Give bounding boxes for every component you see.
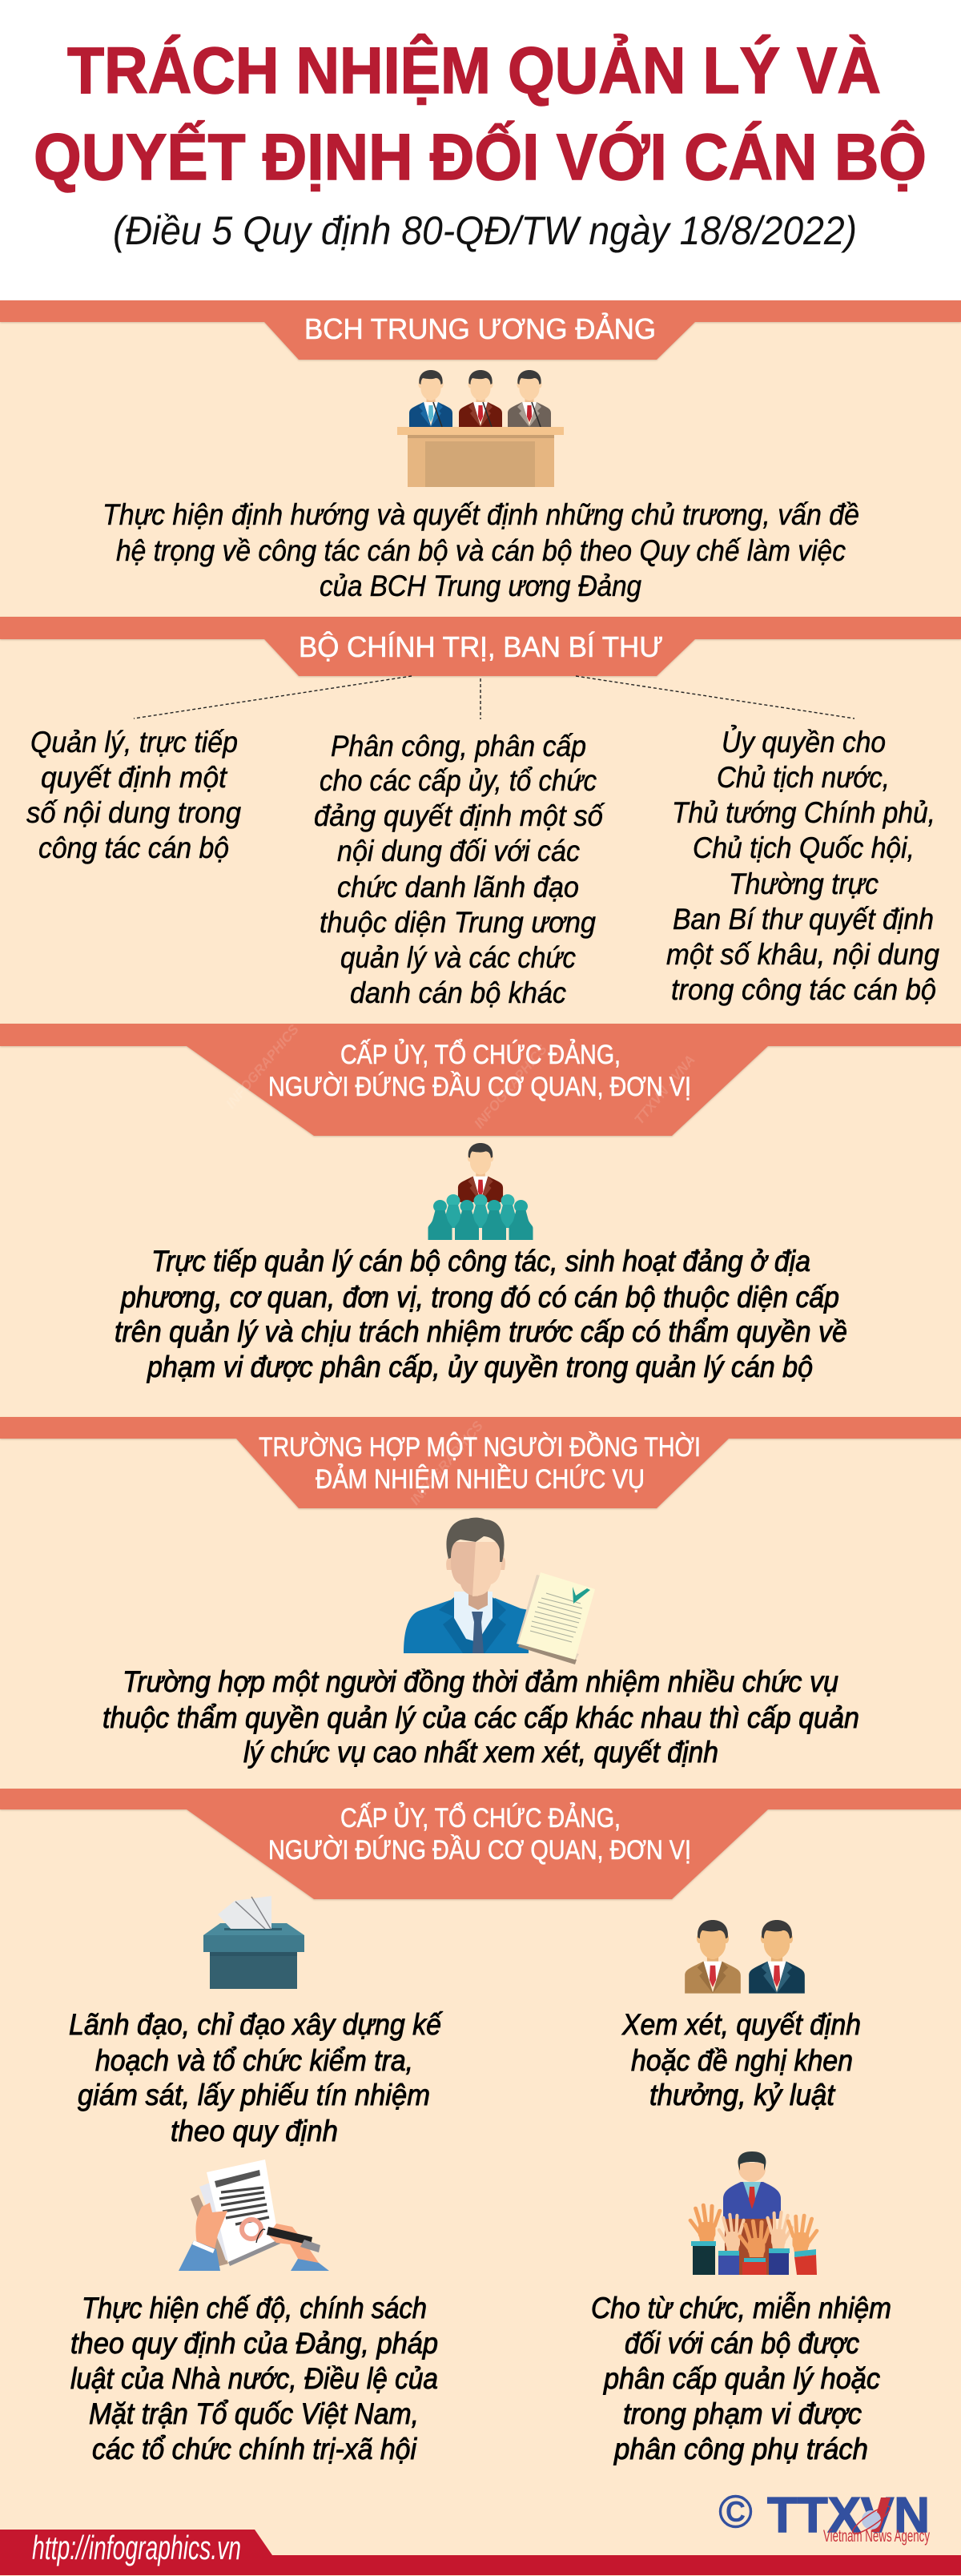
icon: leader and crowd (428, 1143, 533, 1240)
icon: three leaders at podium (397, 370, 564, 487)
text: policy duty: các tổ chức chính trị-xã hội (92, 2433, 418, 2465)
text: resignation and dismissal duty: phân công phụ trách (613, 2433, 868, 2465)
heading: Bộ Chính trị, Ban Bí thư: BỘ CHÍNH TRỊ, BAN BÍ THƯ (299, 630, 663, 663)
text column: right: Thường trực (729, 867, 879, 900)
text column: middle: chức danh lãnh đạo (337, 871, 579, 904)
text: central committee duty: của BCH Trung ương Đảng (320, 570, 641, 602)
icon: two officials (685, 1920, 805, 1994)
text: central committee duty: hệ trọng về công tác cán bộ và cán bộ theo Quy chế làm việc (116, 534, 846, 567)
text column: right: Thủ tướng Chính phủ, (672, 796, 935, 829)
logo: TTXVN Vietnam News Agency: C (726, 2495, 746, 2528)
text: policy duty: Thực hiện chế độ, chính sách (82, 2292, 427, 2324)
text: direct management duty (115, 1245, 847, 1383)
icon: ballot box (203, 1896, 304, 1989)
text column: middle: nội dung đối với các (337, 835, 580, 867)
text column: middle: danh cán bộ khác (350, 976, 566, 1009)
heading: Cấp ủy, tổ chức đảng: TTXVN - VNA (632, 1053, 698, 1128)
text column: right: Ủy quyền cho (722, 725, 886, 759)
text: policy duty (70, 2292, 438, 2465)
title: QUYẾT ĐỊNH ĐỐI VỚI CÁN BỘ (34, 121, 927, 194)
text column: right (666, 725, 939, 1006)
heading: concurrent positions: INFOGRAPHICS (408, 1418, 486, 1508)
heading: Cấp ủy, tổ chức đảng: INFOGRAPHICS (223, 1021, 302, 1112)
text column: left (26, 726, 241, 864)
footer: website band (0, 2529, 961, 2575)
text column: left: số nội dung trong (26, 796, 241, 829)
text column: left: công tác cán bộ (38, 831, 229, 864)
text: reward and discipline duty: thưởng, kỷ luật (649, 2079, 836, 2111)
text: ballot duty: theo quy định (171, 2115, 338, 2147)
heading: BCH Trung ương Đảng: BCH TRUNG ƯƠNG ĐẢNG (304, 312, 656, 345)
text column: right: Chủ tịch nước, (717, 761, 890, 794)
text: concurrent positions rule: Trường hợp một người đồng thời đảm nhiệm nhiều chức vụ (123, 1665, 838, 1698)
text column: right: Ban Bí thư quyết định (673, 903, 934, 936)
heading: Cấp ủy, tổ chức đảng (0, 1789, 961, 1899)
text: central committee duty (103, 498, 859, 602)
title (34, 34, 927, 194)
text column: right: trong công tác cán bộ (671, 973, 936, 1006)
text: central committee duty: Thực hiện định hướng và quyết định những chủ trương, vấn đề (103, 498, 859, 531)
text column: right: Chủ tịch Quốc hội, (693, 831, 915, 864)
text: reward and discipline duty (621, 2008, 861, 2111)
text column: middle: đảng quyết định một số (314, 799, 605, 832)
heading: Cấp ủy, tổ chức đảng: INFOGRAPHICS (472, 1041, 550, 1132)
text column: left: quyết định một (41, 761, 228, 794)
text: reward and discipline duty: Xem xét, quyết định (621, 2008, 861, 2041)
text column: middle: cho các cấp ủy, tổ chức (320, 764, 597, 797)
panel: Cấp ủy, tổ chức đảng (four duties) (0, 1789, 961, 2465)
text column: middle: Phân công, phân cấp (331, 730, 586, 763)
heading: BCH Trung ương Đảng (0, 300, 961, 360)
text column: middle: quản lý và các chức (340, 941, 576, 974)
text: resignation and dismissal duty: trong phạm vi được (623, 2397, 862, 2430)
icon: hands signing document (179, 2159, 329, 2271)
text: resignation and dismissal duty: Cho từ chức, miễn nhiệm (591, 2292, 891, 2324)
text: direct management duty: phương, cơ quan, đơn vị, trong đó có cán bộ thuộc diện cấp (120, 1281, 839, 1314)
text: resignation and dismissal duty: phân cấp quản lý hoặc (603, 2362, 880, 2395)
text: concurrent positions rule: thuộc thẩm quyền quản lý của các cấp khác nhau thì cấp quản (103, 1701, 859, 1734)
text: reward and discipline duty: hoặc đề nghị khen (631, 2044, 853, 2077)
icon: leader and raised hands (690, 2151, 817, 2275)
text: direct management duty: Trực tiếp quản lý cán bộ công tác, sinh hoạt đảng ở địa (151, 1245, 810, 1278)
text: concurrent positions rule (103, 1665, 859, 1769)
text: ballot duty: giám sát, lấy phiếu tín nhiệm (78, 2079, 430, 2111)
heading: Cấp ủy, tổ chức đảng: NGƯỜI ĐỨNG ĐẦU CƠ QUAN, ĐƠN VỊ (268, 1072, 691, 1102)
text: policy duty: Mặt trận Tổ quốc Việt Nam, (89, 2397, 419, 2430)
heading: concurrent positions (0, 1417, 961, 1508)
icon: official holding checked document (404, 1518, 595, 1664)
text: direct management duty: trên quản lý và chịu trách nhiệm trước cấp có thẩm quyền về (115, 1315, 847, 1348)
text: policy duty: theo quy định của Đảng, pháp (70, 2327, 438, 2360)
heading: Bộ Chính trị, Ban Bí thư (0, 617, 961, 676)
text: resignation and dismissal duty (591, 2292, 891, 2465)
footer: website band: http://infographics.vn (32, 2529, 241, 2566)
text column: middle (314, 730, 605, 1009)
text column: middle: thuộc diện Trung ương (320, 906, 596, 939)
connectors: dotted lines to three columns (134, 676, 854, 719)
text: policy duty: luật của Nhà nước, Điều lệ của (70, 2362, 438, 2395)
text: ballot duty: hoạch và tổ chức kiểm tra, (95, 2044, 413, 2077)
heading: Cấp ủy, tổ chức đảng: CẤP ỦY, TỔ CHỨC ĐẢNG, (340, 1803, 621, 1833)
panel: Bộ Chính trị, Ban Bí thư (0, 617, 961, 1009)
heading: Cấp ủy, tổ chức đảng: NGƯỜI ĐỨNG ĐẦU CƠ QUAN, ĐƠN VỊ (268, 1835, 691, 1866)
text: direct management duty: phạm vi được phân cấp, ủy quyền trong quản lý cán bộ (147, 1350, 813, 1383)
text: concurrent positions rule: lý chức vụ cao nhất xem xét, quyết định (243, 1736, 718, 1769)
title: TRÁCH NHIỆM QUẢN LÝ VÀ (67, 34, 881, 107)
text: ballot duty: Lãnh đạo, chỉ đạo xây dựng kế (69, 2008, 443, 2041)
heading: concurrent positions: ĐẢM NHIỆM NHIỀU CHỨC VỤ (316, 1464, 645, 1495)
text column: right: một số khâu, nội dung (666, 938, 939, 971)
logo: TTXVN Vietnam News Agency: TTXVN (767, 2488, 930, 2543)
text column: left: Quản lý, trực tiếp (30, 726, 238, 759)
heading: Cấp ủy, tổ chức đảng (0, 1021, 961, 1136)
heading: Cấp ủy, tổ chức đảng: CẤP ỦY, TỔ CHỨC ĐẢNG, (340, 1040, 621, 1070)
subtitle: (Điều 5 Quy định 80-QĐ/TW ngày 18/8/2022) (113, 208, 857, 253)
panel: Trường hợp một người đồng thời đảm nhiệm nhiều chức vụ (0, 1417, 961, 1769)
text: ballot duty (69, 2008, 443, 2147)
heading: concurrent positions: TRƯỜNG HỢP MỘT NGƯỜI ĐỒNG THỜI (259, 1432, 701, 1463)
panel: BCH Trung ương Đảng (0, 300, 961, 602)
panel: Cấp ủy, tổ chức đảng (direct management) (0, 1021, 961, 1383)
text: resignation and dismissal duty: đối với cán bộ được (625, 2327, 859, 2360)
